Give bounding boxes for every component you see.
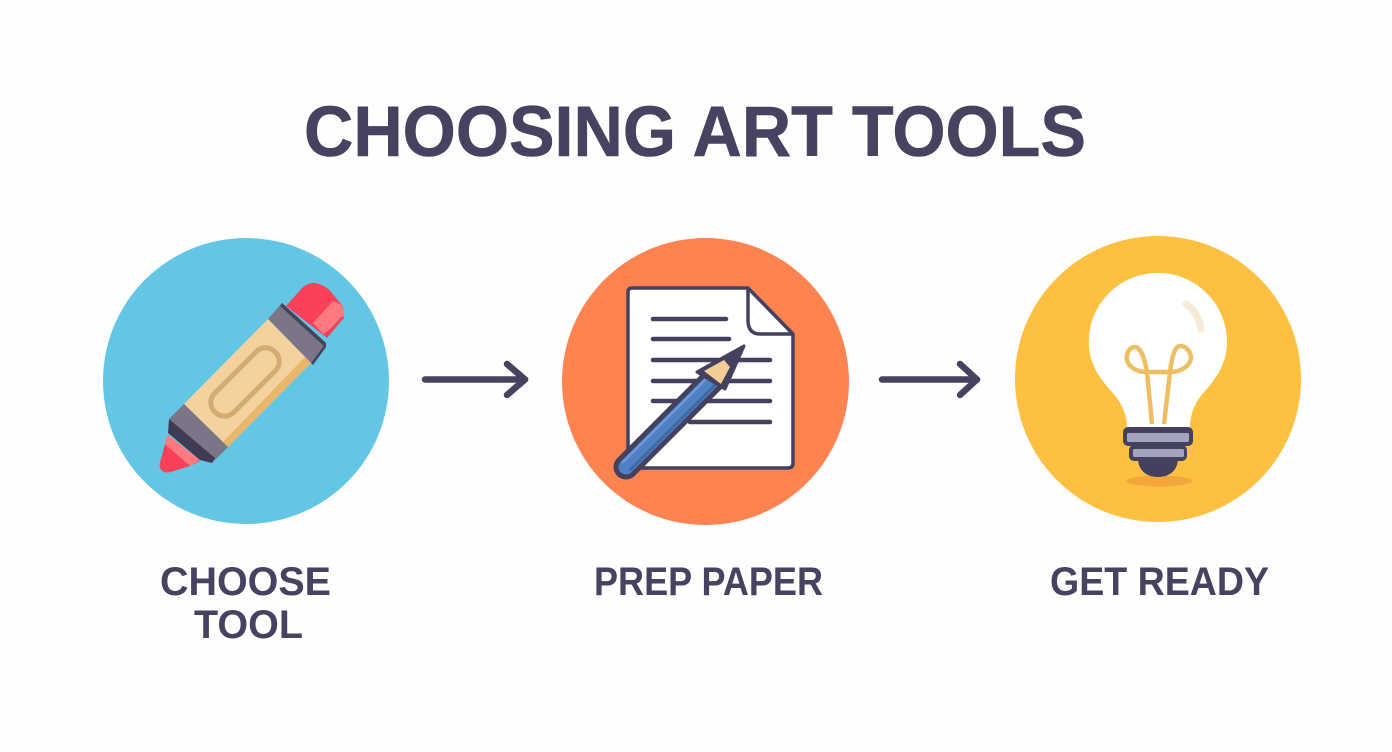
step 2: prep paper icon	[562, 238, 849, 525]
step 3: get ready icon	[1015, 236, 1301, 522]
title: CHOOSING ART TOOLS	[304, 93, 1086, 172]
icon: pencil	[622, 346, 744, 470]
label: choose tool: CHOOSE	[160, 560, 331, 604]
icon: light bulb	[1089, 273, 1227, 486]
arrow 1	[425, 364, 525, 395]
arrow 2	[882, 364, 977, 395]
step 1: choose tool icon	[103, 238, 389, 524]
blue circle	[103, 238, 389, 524]
label: get ready: GET READY	[1050, 560, 1269, 604]
icon: crayon	[160, 283, 344, 472]
icon: paper	[628, 288, 793, 468]
label: choose tool	[160, 560, 331, 647]
orange circle	[562, 238, 849, 525]
yellow circle	[1015, 236, 1301, 522]
label: choose tool: TOOL	[194, 603, 303, 647]
label: prep paper: PREP PAPER	[594, 560, 823, 604]
